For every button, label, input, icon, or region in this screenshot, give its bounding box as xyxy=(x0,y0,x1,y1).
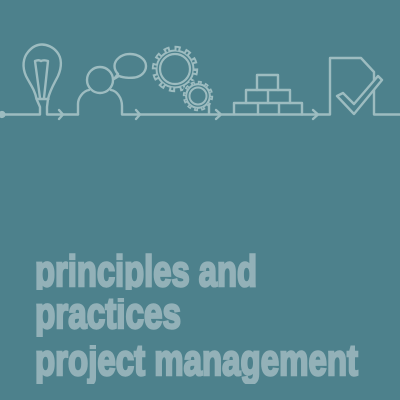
icon: light bulb xyxy=(2,44,78,114)
icon: large gear xyxy=(154,48,196,90)
title line 2: practices xyxy=(35,289,181,338)
icon: small gear xyxy=(182,80,214,112)
timeline start dot xyxy=(0,112,4,117)
icon: document xyxy=(302,58,400,114)
arrows on the timeline xyxy=(59,110,318,119)
title xyxy=(35,247,358,385)
icon: check mark xyxy=(337,76,382,114)
icon: brick wall xyxy=(234,75,302,114)
title line 1: principles and xyxy=(35,247,257,296)
timeline connector through gears and bricks xyxy=(140,105,302,114)
icon: person with speech bubble xyxy=(78,54,146,114)
process timeline illustration xyxy=(0,44,400,119)
